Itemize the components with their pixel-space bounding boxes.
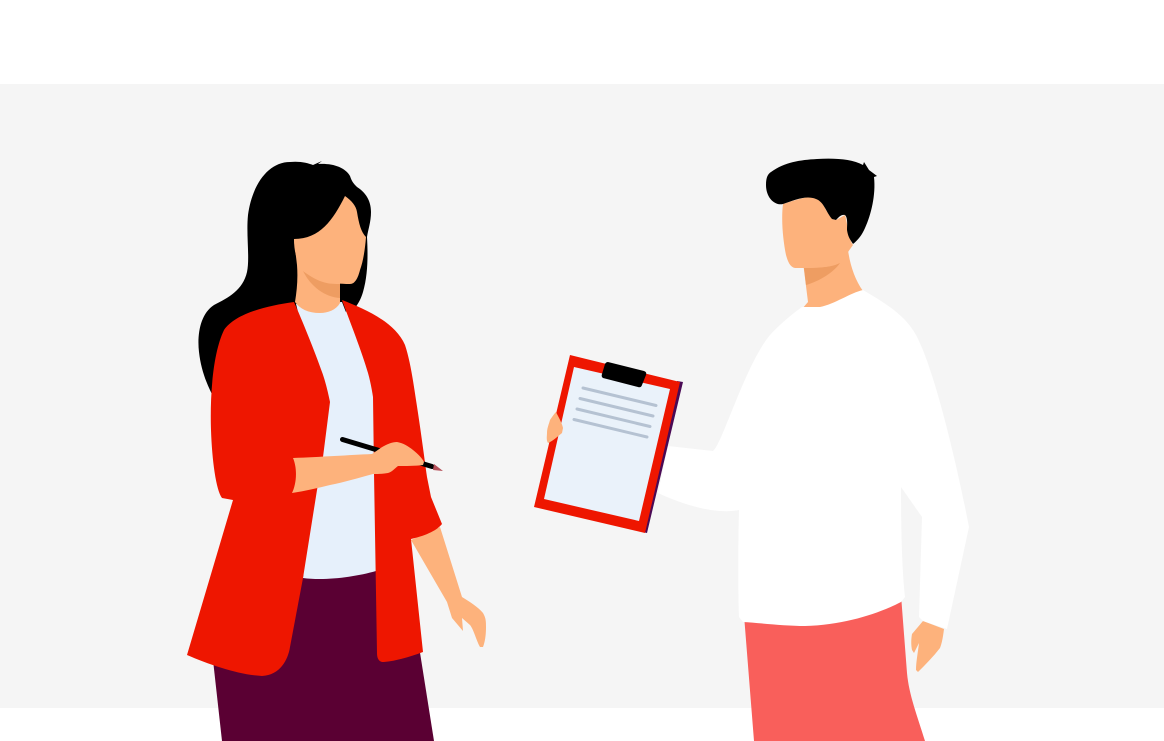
clipboard board — [534, 355, 680, 533]
clipboard clip — [602, 362, 646, 387]
woman forearm and hand — [292, 442, 424, 493]
woman hair back — [198, 161, 371, 398]
man near hand — [547, 412, 563, 443]
man sweater — [658, 290, 969, 629]
woman face — [294, 196, 366, 284]
woman skirt — [213, 560, 434, 741]
woman neck — [294, 240, 340, 313]
man neck — [802, 250, 863, 312]
man trousers — [744, 595, 925, 741]
woman shirt — [296, 302, 380, 579]
woman figure — [187, 161, 486, 741]
man figure — [658, 159, 969, 741]
pen — [342, 440, 443, 471]
woman jacket left — [187, 302, 330, 676]
man hair — [766, 159, 877, 244]
man face — [782, 197, 853, 268]
man neck shadow — [804, 263, 840, 285]
clipboard — [534, 355, 683, 533]
clipboard paper — [544, 367, 670, 521]
woman left arm skin — [411, 527, 486, 647]
clipboard back edge — [643, 381, 683, 533]
clipboard text lines — [574, 388, 656, 437]
woman jacket right — [342, 300, 442, 662]
man far hand — [911, 621, 944, 672]
woman neck shadow — [303, 271, 340, 298]
